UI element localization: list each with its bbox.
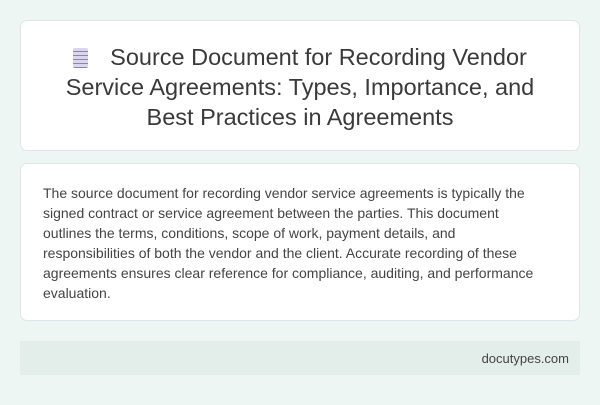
header card: [20, 20, 580, 151]
icon: document: [73, 48, 88, 68]
body card: [20, 163, 580, 321]
footer text: docutypes.com: [482, 351, 569, 366]
description text: The source document for recording vendor service agreements is typically the signed contract or service agreement between the parties. This document outlines the terms, conditions, scope of work, payment details, and responsibilities of both the vendor and the client. Accurate recording of these agreements ensures clear reference for compliance, auditing, and performance evaluation.: [43, 185, 533, 301]
footer: [20, 341, 580, 375]
title: Source Document for Recording Vendor Service Agreements: Types, Importance, and Best Practices in Agreements: [66, 44, 534, 130]
